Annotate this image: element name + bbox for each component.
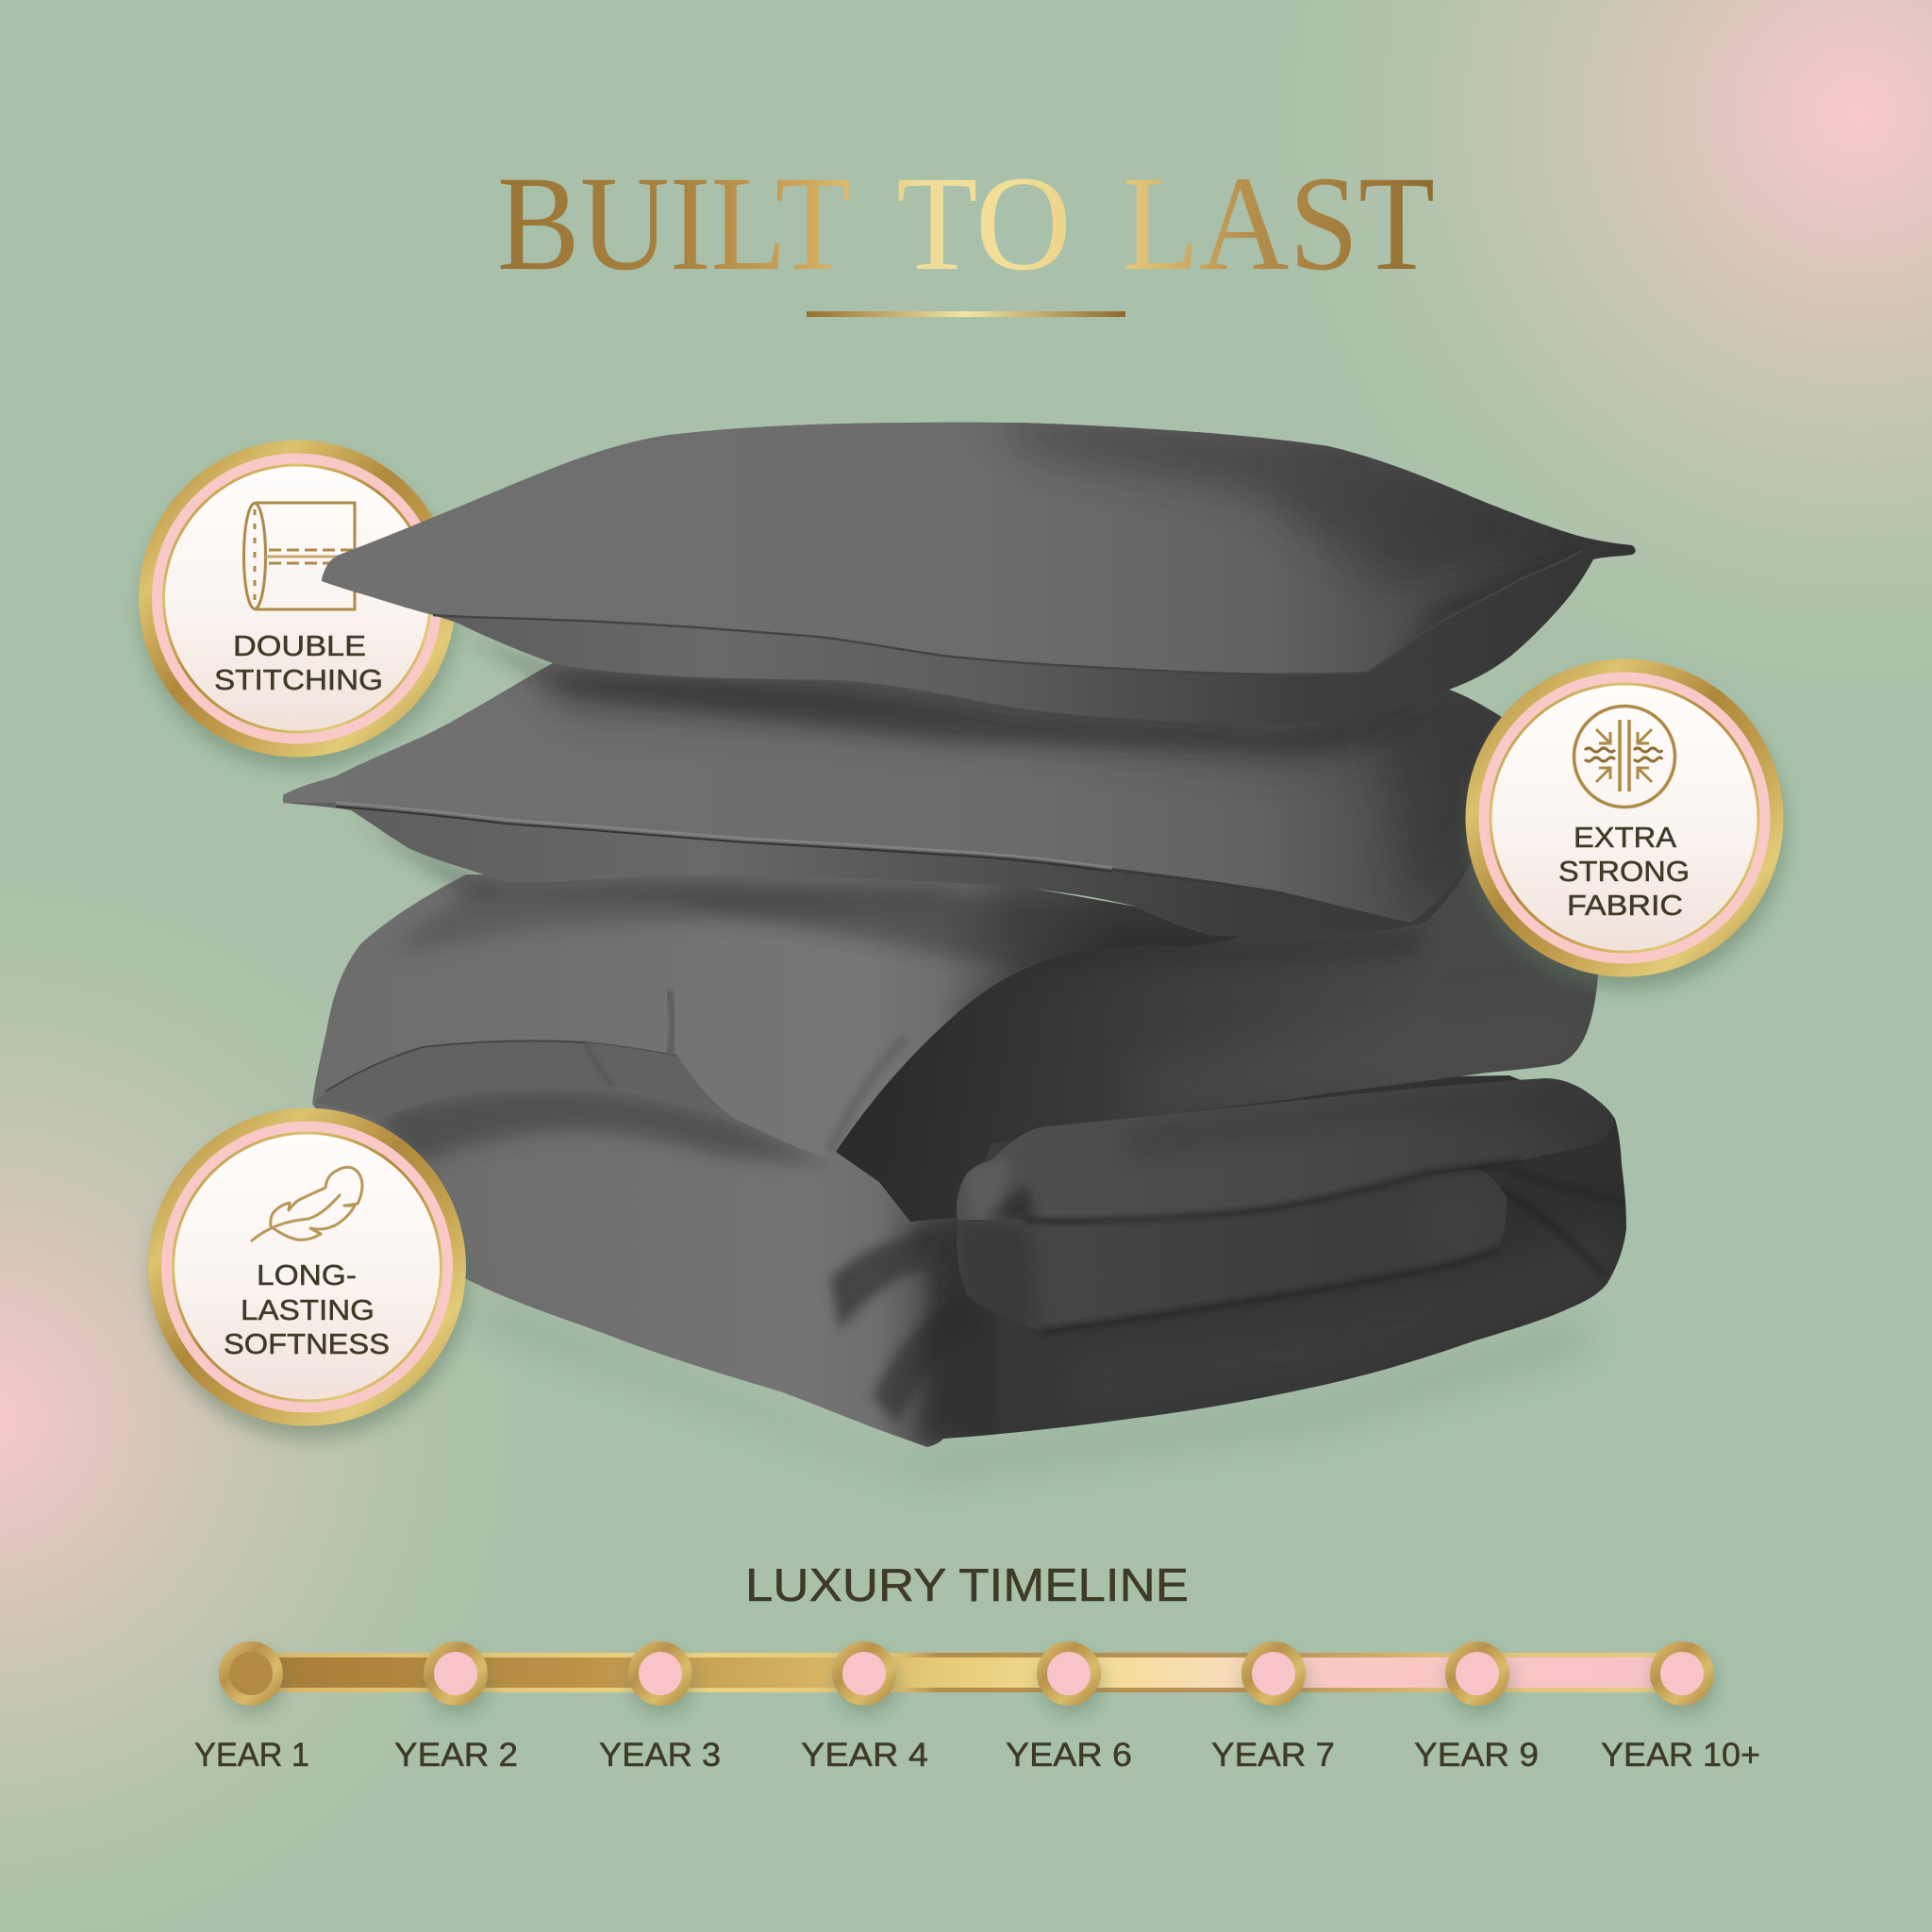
title: TO [896, 149, 1072, 299]
badge text: long-lasting softness: SOFTNESS [224, 1327, 390, 1360]
timeline node: year 7 [1241, 1641, 1307, 1714]
badge text: double stitching: DOUBLE [233, 629, 366, 662]
badge text: double stitching: STITCHING [214, 663, 383, 696]
top pillow [322, 415, 1636, 750]
icon: strong fabric weave [1574, 706, 1675, 808]
title [497, 149, 1435, 299]
title underline [807, 311, 1125, 317]
timeline node: year 1 [219, 1641, 284, 1714]
middle pillow [283, 660, 1528, 972]
badge: long-lasting softness [148, 1108, 468, 1439]
duvet back fold [836, 849, 1598, 1222]
duvet flap [312, 873, 1264, 1157]
badge: double stitching [139, 440, 458, 770]
duvet roll, top layer [957, 1078, 1615, 1226]
timeline labels: YEAR 3 [599, 1737, 721, 1774]
badge text: long-lasting softness: LASTING [241, 1293, 375, 1326]
heading: luxury timeline: LUXURY TIMELINE [745, 1560, 1189, 1611]
timeline labels: YEAR 7 [1211, 1737, 1335, 1774]
duvet lower body [312, 1057, 1626, 1447]
title: LAST [1123, 149, 1435, 299]
timeline labels: YEAR 10+ [1601, 1737, 1760, 1774]
timeline labels: YEAR 2 [394, 1737, 518, 1774]
icon: pillow with double stitching [243, 503, 355, 609]
timeline node: year 6 [1037, 1641, 1102, 1714]
badge: extra strong fabric [1466, 658, 1785, 990]
timeline node: year 3 [628, 1641, 693, 1714]
bedding stack [283, 415, 1636, 1447]
badge text: extra strong fabric: EXTRA [1574, 821, 1676, 854]
badge text: extra strong fabric: STRONG [1558, 855, 1690, 888]
badge text: double stitching [214, 629, 383, 696]
timeline labels: YEAR 1 [194, 1737, 309, 1774]
timeline node: year 9 [1445, 1641, 1510, 1714]
timeline node: year 4 [832, 1641, 897, 1714]
timeline bar [251, 1653, 1682, 1692]
timeline node: year 10+ [1650, 1641, 1715, 1714]
icon: feather [252, 1167, 362, 1241]
badge text: long-lasting softness [224, 1258, 390, 1360]
badge text: extra strong fabric [1558, 821, 1690, 922]
badge text: long-lasting softness: LONG- [257, 1258, 357, 1291]
duvet flap strip [314, 1041, 735, 1119]
timeline labels: YEAR 9 [1414, 1737, 1539, 1774]
timeline labels: YEAR 6 [1006, 1737, 1132, 1774]
timeline labels [194, 1737, 1760, 1774]
timeline [194, 1641, 1760, 1774]
timeline labels: YEAR 4 [801, 1737, 928, 1774]
timeline node: year 2 [424, 1641, 489, 1714]
ground shadow [472, 1297, 1594, 1476]
duvet roll, lower layer [953, 1169, 1509, 1340]
title: BUILT [497, 149, 851, 299]
badge text: extra strong fabric: FABRIC [1567, 889, 1683, 922]
